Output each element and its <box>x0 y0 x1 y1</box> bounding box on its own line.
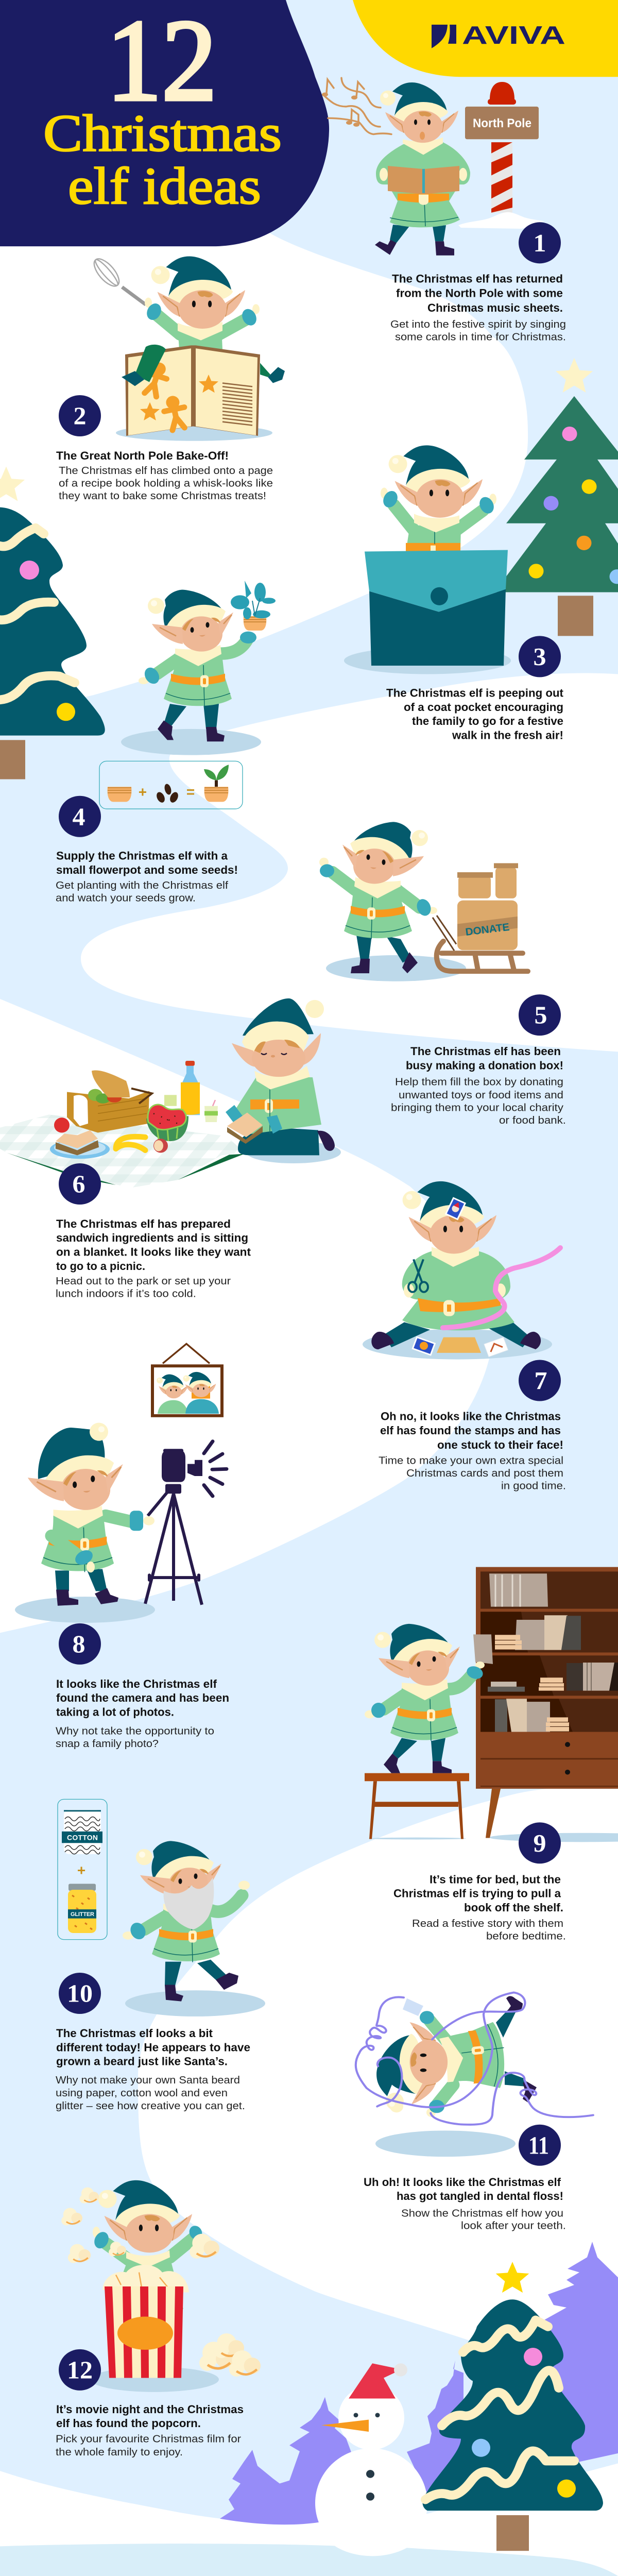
music notes <box>322 78 391 134</box>
picnic blanket <box>0 1114 245 1188</box>
bookcase <box>476 1567 618 1838</box>
heading step 12 <box>56 2403 244 2430</box>
number badge 10 <box>59 1973 101 2014</box>
popcorn bucket <box>102 2265 189 2378</box>
number badge 7 <box>519 1360 561 1401</box>
panel: step 1 <box>322 78 566 343</box>
heading step 10: different today! He appears to have <box>56 2041 250 2054</box>
heading step 5 <box>406 1045 563 1072</box>
panel: step 10 <box>56 1799 265 2112</box>
elf with stamps <box>371 1181 560 1357</box>
body text step 1 <box>390 318 566 343</box>
sign label: North Pole <box>473 116 531 130</box>
body text step 12: the whole family to enjoy. <box>56 2446 183 2458</box>
number badge 11: 11 <box>528 2131 549 2159</box>
panel: step 12 <box>56 2180 261 2458</box>
large teal Christmas tree <box>422 2262 603 2551</box>
body text step 4 <box>56 879 228 904</box>
body text step 2: The Christmas elf has climbed onto a page <box>59 465 273 477</box>
heading step 12: It’s movie night and the Christmas <box>56 2403 244 2416</box>
body text step 12: Pick your favourite Christmas film for <box>56 2433 241 2445</box>
heading step 8: found the camera and has been <box>56 1691 229 1704</box>
heading step 8: taking a lot of photos. <box>56 1706 174 1718</box>
body text step 11: look after your teeth. <box>461 2220 566 2232</box>
heading step 6 <box>56 1217 251 1273</box>
body text step 10: Why not make your own Santa beard <box>56 2074 240 2086</box>
number badge 4 <box>59 796 101 837</box>
number badge 5: 5 <box>535 1001 547 1029</box>
heading step 1: The Christmas elf has returned <box>392 273 563 285</box>
body text step 4: Get planting with the Christmas elf <box>56 879 228 891</box>
body text step 8 <box>56 1725 214 1750</box>
shadow <box>363 1329 552 1360</box>
north pole sign <box>458 82 544 229</box>
panel: winter scene <box>0 2242 618 2576</box>
elf with camera <box>28 1423 154 1606</box>
glitter jar <box>68 1884 96 1933</box>
elf carolling <box>375 82 470 256</box>
heading step 3: of a coat pocket encouraging <box>404 701 563 714</box>
dental floss <box>356 1992 593 2125</box>
elf with beard <box>123 1841 250 2002</box>
panel: step 8 <box>15 1344 229 1750</box>
stool <box>365 1773 469 1839</box>
panel: step 2 <box>56 255 285 502</box>
flying popcorn <box>61 2188 261 2377</box>
body text step 6 <box>56 1275 231 1300</box>
panel: step 6 <box>0 998 341 1300</box>
number badge 3 <box>519 636 561 677</box>
heading step 1 <box>392 273 563 314</box>
number badge 11 <box>519 2125 561 2166</box>
upside-down elf tangled in floss <box>356 1992 593 2125</box>
body text step 8: Why not take the opportunity to <box>56 1725 214 1737</box>
heading step 4: small flowerpot and some seeds! <box>56 863 238 876</box>
body text step 7: Christmas cards and post them <box>406 1467 563 1479</box>
elf peeping from pocket <box>381 445 496 552</box>
heading step 11: Uh oh! It looks like the Christmas elf <box>364 2176 561 2189</box>
number badge 6 <box>59 1163 101 1205</box>
whisk <box>90 255 146 304</box>
elf in popcorn box <box>61 2180 261 2377</box>
heading step 9: It’s time for bed, but the <box>430 1873 561 1886</box>
elf sandwich <box>227 1112 263 1144</box>
heading step 2: The Great North Pole Bake-Off! <box>56 449 229 462</box>
body text step 9: before bedtime. <box>486 1930 566 1942</box>
body text step 2 <box>59 465 273 502</box>
body text step 5: bringing them to your local charity <box>391 1102 564 1113</box>
heading step 8: It looks like the Christmas elf <box>56 1677 217 1690</box>
body text step 1: Get into the festive spirit by singing <box>390 318 566 330</box>
heading step 4 <box>56 850 238 876</box>
heading step 9: Christmas elf is trying to pull a <box>393 1887 561 1900</box>
body text step 5: unwanted toys or food items and <box>399 1089 563 1101</box>
heading step 11: has got tangled in dental floss! <box>397 2190 563 2202</box>
panel: step 3 <box>344 445 564 741</box>
number badge 6: 6 <box>73 1170 85 1198</box>
number badge 8 <box>59 1623 101 1665</box>
shadow <box>90 2367 219 2392</box>
books <box>488 1573 618 1732</box>
body text step 6: lunch indoors if it’s too cold. <box>56 1288 196 1300</box>
picnic food <box>50 1061 218 1159</box>
body text step 12 <box>56 2433 241 2458</box>
craft supplies box: + <box>77 1862 85 1878</box>
body text step 1: some carols in time for Christmas. <box>395 331 566 343</box>
body text step 11 <box>401 2208 566 2232</box>
logo wordmark: AVIVA <box>462 21 565 49</box>
body text step 11: Show the Christmas elf how you <box>401 2208 563 2219</box>
heading step 10: grown a beard just like Santa’s. <box>56 2055 228 2068</box>
body text step 5 <box>391 1076 566 1126</box>
santa beard <box>163 1878 214 1929</box>
heading step 3: The Christmas elf is peeping out <box>386 687 564 699</box>
heading step 9 <box>393 1873 563 1914</box>
title line two: elf ideas <box>68 157 261 215</box>
body text step 7 <box>379 1455 566 1492</box>
body text step 7: Time to make your own extra special <box>379 1455 563 1466</box>
heading step 8 <box>56 1677 229 1718</box>
scissors <box>408 1259 428 1292</box>
body text step 8: snap a family photo? <box>56 1738 159 1750</box>
coat pocket <box>365 550 508 666</box>
body text step 2: of a recipe book holding a whisk-looks like <box>59 478 273 489</box>
heading step 3: the family to go for a festive <box>412 715 563 727</box>
shadow <box>326 955 466 981</box>
heading step 9: book off the shelf. <box>464 1901 563 1914</box>
shadow <box>344 647 511 674</box>
heading step 1: from the North Pole with some <box>396 287 563 300</box>
shadows <box>368 1833 618 1842</box>
panel: logo corner <box>353 0 618 77</box>
number badge 4: 4 <box>73 803 85 831</box>
elf with donation sled <box>319 822 437 973</box>
shadow <box>121 729 261 755</box>
cotton label: COTTON <box>67 1834 98 1841</box>
number badge 2: 2 <box>74 402 86 430</box>
shadow <box>246 1141 341 1163</box>
number badge 8: 8 <box>73 1630 85 1658</box>
elf holding plant <box>139 581 276 741</box>
heading step 6: The Christmas elf has prepared <box>56 1217 231 1230</box>
heading step 7: Oh no, it looks like the Christmas <box>381 1410 561 1423</box>
panel: teal Christmas tree left <box>0 467 105 779</box>
juice bottle <box>181 1061 200 1115</box>
body text step 5: Help them fill the box by donating <box>395 1076 563 1088</box>
elf front leg over book <box>122 345 166 386</box>
icon: Aviva flag <box>432 25 456 48</box>
shadow <box>116 425 272 441</box>
sled with donation box <box>433 863 528 971</box>
sandwich on plate <box>56 1130 99 1155</box>
elf on recipe book <box>90 255 285 383</box>
bottom snow bank <box>0 2544 618 2576</box>
body text step 7: in good time. <box>501 1480 566 1492</box>
icon: potted plant <box>231 581 276 631</box>
heading step 6: on a blanket. It looks like they want <box>56 1246 251 1258</box>
body text step 10: glitter – see how creative you can get. <box>56 2100 245 2112</box>
recipe book <box>125 345 260 436</box>
body text step 2: they want to bake some Christmas treats! <box>59 490 266 502</box>
panel: step 9 <box>365 1567 618 1942</box>
panel: step 5 <box>319 822 566 1126</box>
heading step 12: elf has found the popcorn. <box>56 2417 201 2430</box>
body text step 10 <box>56 2074 245 2112</box>
heading step 7 <box>380 1410 563 1451</box>
number badge 3: 3 <box>534 643 546 671</box>
heading step 6: to go to a picnic. <box>56 1260 145 1273</box>
body text step 5: or food bank. <box>499 1114 566 1126</box>
box label: DONATE <box>465 921 510 938</box>
panel: green Christmas tree <box>494 358 618 636</box>
tripod camera <box>145 1442 227 1605</box>
number badge 9: 9 <box>534 1829 546 1857</box>
heading step 10 <box>56 2027 250 2068</box>
number badge 12 <box>59 2349 101 2391</box>
number badge 10: 10 <box>67 1979 93 2008</box>
number badge 2 <box>59 395 101 436</box>
flowerpot equation box <box>99 761 243 809</box>
craft supplies box <box>58 1799 107 1940</box>
body text step 4: and watch your seeds grow. <box>56 892 196 904</box>
number badge 1 <box>519 222 561 263</box>
stamp on face <box>445 1197 466 1220</box>
heading step 1: Christmas music sheets. <box>427 301 563 314</box>
body text step 6: Head out to the park or set up your <box>56 1275 231 1287</box>
snowman <box>315 2363 427 2558</box>
flash lines <box>204 1442 227 1496</box>
body text step 9: Read a festive story with them <box>412 1918 563 1929</box>
heading step 5: busy making a donation box! <box>406 1059 563 1072</box>
heading step 7: one stuck to their face! <box>437 1438 563 1451</box>
body text step 9 <box>412 1918 566 1942</box>
picture frame <box>152 1344 222 1416</box>
heading step 3: walk in the fresh air! <box>452 729 563 741</box>
flowerpot equation box: = <box>186 784 195 800</box>
number badge 9 <box>519 1822 561 1863</box>
flowerpot equation box: + <box>139 784 147 800</box>
elf with sandwich <box>226 998 335 1155</box>
panel: title blob <box>0 0 329 246</box>
watermelon <box>146 1105 188 1141</box>
stamps and paper on floor <box>411 1336 508 1357</box>
purple pine trees <box>220 2242 618 2524</box>
cotton jar <box>62 1810 102 1854</box>
number badge 12: 12 <box>67 2356 93 2384</box>
number badge 1: 1 <box>534 229 546 257</box>
panel: step 4 <box>56 581 276 904</box>
heading step 5: The Christmas elf has been <box>410 1045 561 1058</box>
pink ribbon <box>443 1248 560 1328</box>
shadow <box>375 2130 516 2157</box>
number badge 7: 7 <box>535 1367 547 1395</box>
heading step 4: Supply the Christmas elf with a <box>56 850 228 862</box>
elf head and hat <box>28 1423 123 1510</box>
heading step 10: The Christmas elf looks a bit <box>56 2027 213 2040</box>
heading step 6: sandwich ingredients and is sitting <box>56 1231 248 1244</box>
shadow <box>125 1990 265 2016</box>
elf reaching for book <box>365 1624 493 1773</box>
heading step 7: elf has found the stamps and has <box>380 1424 561 1437</box>
heading step 11 <box>364 2176 563 2202</box>
body text step 10: using paper, cotton wool and even <box>56 2087 228 2099</box>
heading step 3 <box>386 687 564 741</box>
panel: step 7 <box>363 1181 566 1492</box>
number badge 5 <box>519 994 561 1036</box>
panel: step 11 <box>356 1992 593 2232</box>
glitter label: GLITTER <box>71 1911 94 1918</box>
shadow <box>15 1597 155 1623</box>
title line one: Christmas <box>43 105 282 162</box>
